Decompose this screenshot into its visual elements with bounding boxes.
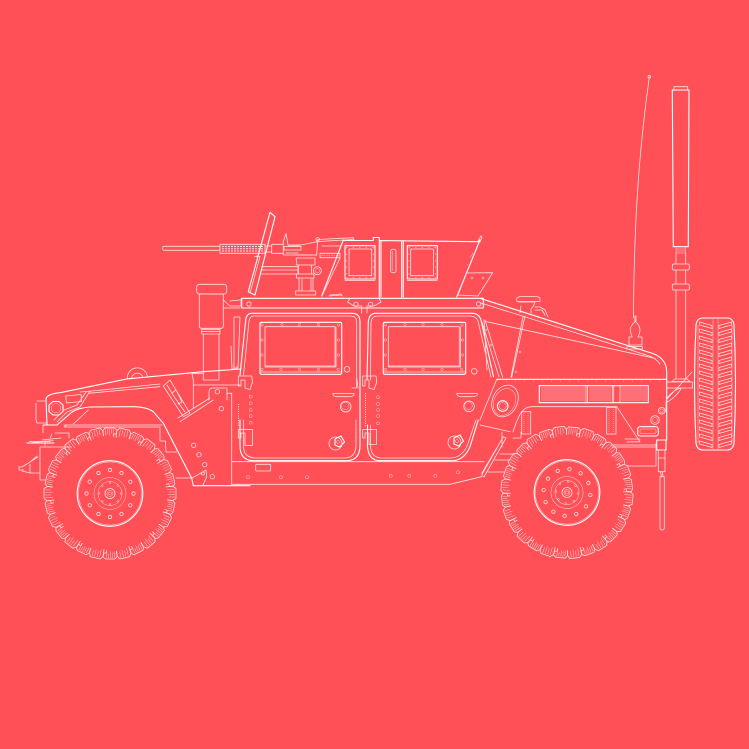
- window bolts: [384, 323, 464, 371]
- jack stand: [657, 402, 666, 530]
- hinges: [238, 376, 252, 446]
- gun shield: [248, 212, 275, 295]
- tail lamp: [487, 381, 523, 421]
- fender rivets: [192, 390, 224, 479]
- rear wheel arch: [513, 407, 657, 466]
- turret window left: [345, 246, 375, 280]
- headlight: [49, 402, 63, 415]
- front bumper and tow hook: [18, 425, 70, 480]
- roof rail: [242, 298, 483, 313]
- tow ring: [127, 368, 148, 379]
- sill: [232, 462, 484, 484]
- front wheel: [44, 427, 176, 560]
- fuel filler: [517, 296, 548, 317]
- left door: [238, 313, 360, 461]
- rear wheel: [494, 420, 640, 565]
- hood and cowl: [36, 368, 241, 485]
- rear strut: [482, 432, 515, 477]
- turret rear flap: [458, 273, 493, 296]
- pintle mount: [262, 255, 321, 295]
- door handle: [333, 378, 356, 397]
- turret armour: [322, 238, 480, 297]
- hood vent: [66, 394, 82, 403]
- window bolts: [261, 323, 340, 371]
- hinge holes and ticks: [238, 395, 252, 427]
- machine gun: [163, 234, 354, 258]
- gun and turret: [163, 212, 493, 297]
- door lock: [329, 436, 344, 450]
- hinge holes and ticks: [366, 393, 380, 427]
- a-pillar strut: [231, 317, 240, 369]
- intake grille: [539, 386, 648, 403]
- window left: [260, 322, 342, 374]
- right door: [363, 313, 494, 461]
- air intake snorkel: [197, 284, 241, 380]
- cowl brace: [178, 388, 232, 485]
- whip antenna: [627, 75, 651, 349]
- spare tire: [694, 318, 736, 450]
- hood latch: [163, 380, 190, 417]
- front fender: [43, 407, 250, 486]
- hinges: [363, 376, 377, 444]
- door handle: [457, 394, 477, 397]
- door lock: [448, 435, 464, 449]
- mast: [667, 87, 692, 402]
- rear lights: [638, 407, 665, 436]
- window right: [383, 322, 466, 374]
- hatch slot: [391, 249, 396, 273]
- turret window right: [407, 246, 437, 280]
- rear cargo shell: [480, 298, 667, 440]
